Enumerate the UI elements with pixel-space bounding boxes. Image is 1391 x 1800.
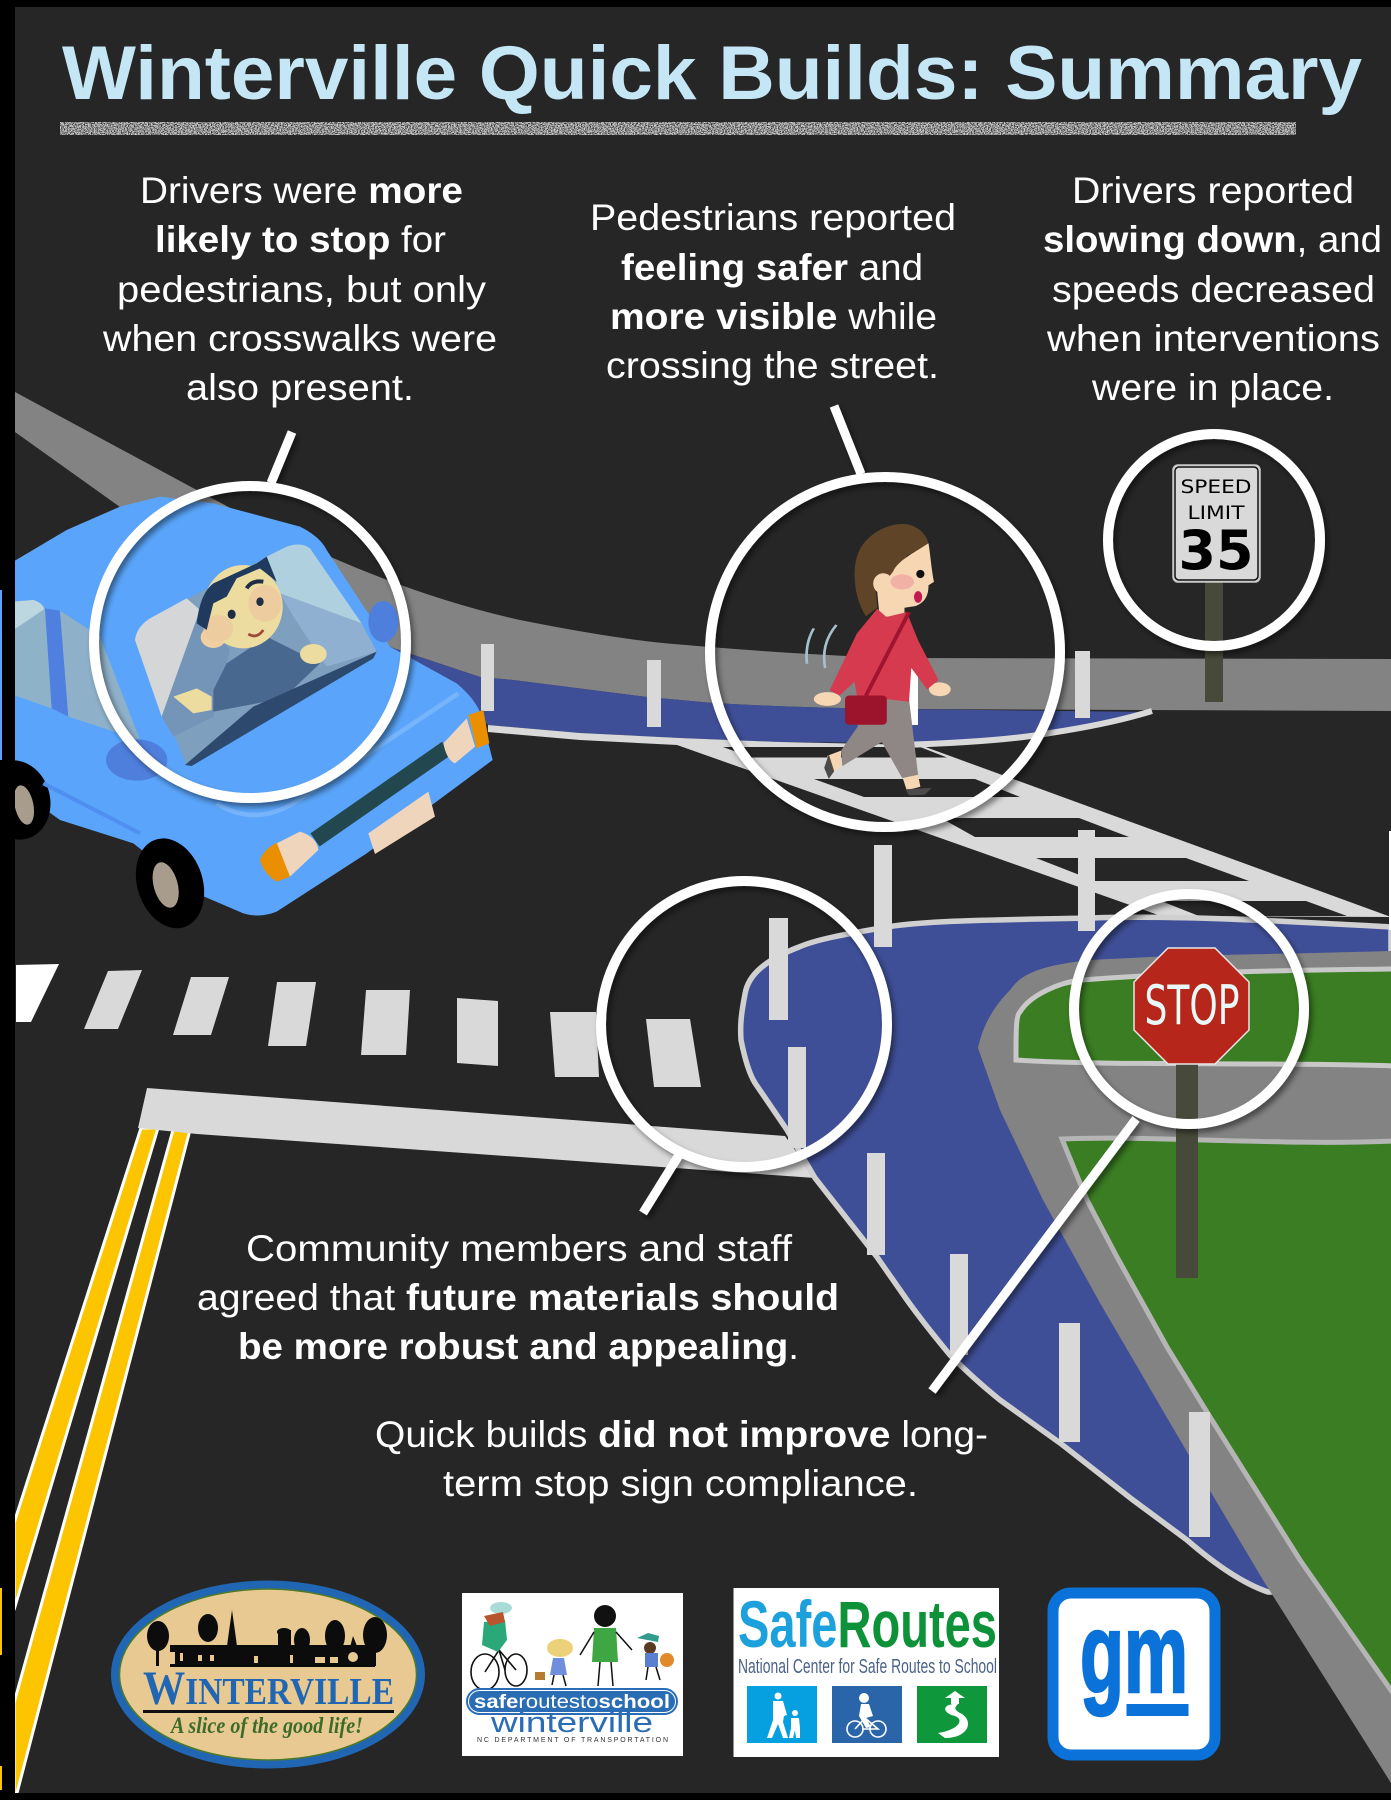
circle: pedestrian xyxy=(710,477,1060,827)
text: pedestrians safer: crossing the street. xyxy=(606,345,939,386)
text: future materials: be more robust and appealing . xyxy=(238,1326,799,1367)
icon: speed limit sign xyxy=(1173,465,1260,582)
leader: materials xyxy=(643,1155,679,1213)
licence plate xyxy=(368,792,435,854)
logo: GM xyxy=(1053,1590,1215,1755)
headlight right xyxy=(443,710,489,763)
bag strap xyxy=(866,612,909,696)
circle: driver xyxy=(94,486,406,798)
icon: winding route xyxy=(917,1686,987,1743)
pill inner line xyxy=(468,1690,676,1712)
eye xyxy=(916,570,924,578)
mouth xyxy=(914,591,922,603)
grille xyxy=(315,748,447,840)
text: slowing down: were in place. xyxy=(1091,367,1334,408)
rider xyxy=(482,1602,512,1652)
text: pedestrians safer xyxy=(590,197,956,386)
trousers xyxy=(841,699,918,778)
icon: blue car with driver xyxy=(0,497,493,937)
double yellow centre line xyxy=(14,1128,190,1793)
text: stop compliance: term stop sign compliance. xyxy=(443,1463,918,1504)
text: slowing down: when interventions xyxy=(1046,318,1380,359)
white panel xyxy=(734,1588,999,1757)
car body xyxy=(13,497,493,915)
logo: Town of Winterville xyxy=(115,1584,421,1764)
text: drivers stop: Drivers were more xyxy=(140,170,463,211)
adult xyxy=(580,1605,632,1686)
side line xyxy=(43,783,140,833)
child right xyxy=(637,1633,674,1680)
hands xyxy=(814,682,951,706)
logo: National Center for Safe Routes to School xyxy=(734,1587,999,1757)
lane edge line xyxy=(900,711,1152,745)
circle: stop sign xyxy=(1074,894,1304,1124)
text: stop compliance: Quick builds did not improve long- xyxy=(375,1414,988,1455)
sign border xyxy=(1175,467,1258,580)
text: drivers stop xyxy=(102,170,497,408)
side windows xyxy=(13,600,140,740)
rule xyxy=(143,1710,394,1713)
windows xyxy=(168,1652,358,1664)
winterville wordmark: winterville xyxy=(490,1707,653,1739)
text: future materials xyxy=(197,1228,839,1367)
sign text xyxy=(1178,476,1254,582)
title underline xyxy=(60,122,1296,135)
skyline xyxy=(147,1610,387,1667)
town name: WINTERVILLE xyxy=(143,1662,394,1715)
icon: walking xyxy=(747,1686,817,1743)
speed sign post xyxy=(1205,582,1223,702)
windshield xyxy=(135,545,377,765)
dashed crosswalk stripes xyxy=(16,964,701,1087)
octagon xyxy=(1134,948,1249,1064)
border edge slivers xyxy=(0,590,2,1790)
sign text: 35 xyxy=(1178,519,1254,582)
text: pedestrians safer: more visible while xyxy=(610,296,937,337)
hood highlight xyxy=(217,693,458,815)
text: drivers stop: likely to stop for xyxy=(155,219,446,260)
leader: pedestrian xyxy=(834,406,861,474)
stop label: STOP xyxy=(1144,974,1240,1037)
magnifier circles and leader lines xyxy=(94,406,1320,1391)
white panel xyxy=(462,1593,683,1756)
subtitle: National Center for Safe Routes to School xyxy=(738,1656,997,1678)
stop sign post xyxy=(1176,1061,1198,1278)
text: stop compliance xyxy=(375,1414,988,1504)
leader: stop sign xyxy=(932,1119,1136,1391)
dashboard xyxy=(185,652,377,766)
text: drivers stop: pedestrians, but only xyxy=(117,269,487,310)
GM underline xyxy=(1126,1704,1188,1716)
headlight left xyxy=(260,832,318,882)
NCDOT line: NC DEPARTMENT OF TRANSPORTATION xyxy=(477,1737,668,1744)
sign plate xyxy=(1173,465,1260,582)
wordmark: SafeRoutes xyxy=(738,1587,997,1661)
icon: stop sign xyxy=(1134,948,1249,1064)
text: pedestrians safer: feeling safer and xyxy=(621,247,923,288)
text: slowing down: speeds decreased xyxy=(1052,269,1375,310)
driver head xyxy=(197,557,283,648)
text: slowing down: slowing down, and xyxy=(1043,219,1382,260)
blue island xyxy=(741,917,1391,1592)
front wheel xyxy=(125,829,215,937)
text: slowing down: Drivers reported xyxy=(1072,170,1354,211)
leader: driver xyxy=(271,432,292,483)
oval xyxy=(115,1584,421,1764)
icon: walking woman xyxy=(807,524,951,795)
circle: speed sign xyxy=(1108,434,1320,646)
lower green area xyxy=(1062,1138,1391,1696)
ear xyxy=(873,573,893,594)
rear wheel xyxy=(0,753,59,847)
banner text: safe routes toschool xyxy=(474,1692,670,1713)
side mirrors xyxy=(106,601,398,781)
badge xyxy=(1053,1593,1215,1755)
driver hands xyxy=(173,644,327,713)
text: slowing down xyxy=(1043,170,1382,408)
face xyxy=(877,543,934,618)
delineator posts xyxy=(481,644,1391,1537)
child left xyxy=(535,1639,573,1686)
oval inner ring xyxy=(120,1589,416,1760)
text: drivers stop: when crosswalks were xyxy=(102,318,497,359)
slogan: A slice of the good life! xyxy=(169,1713,363,1738)
circle: crosswalk materials xyxy=(601,881,887,1167)
gray inner road xyxy=(978,951,1391,1783)
diagonal ladder crosswalk xyxy=(488,725,1391,917)
text: future materials: Community members and staff xyxy=(246,1228,793,1269)
title: Winterville Quick Builds: Summary xyxy=(62,31,1362,116)
sign text: LIMIT xyxy=(1188,502,1245,524)
text: pedestrians safer: Pedestrians reported xyxy=(590,197,956,238)
bag xyxy=(845,696,887,725)
text: future materials: agreed that future materials should xyxy=(197,1277,839,1318)
icon: cycling xyxy=(832,1686,902,1743)
feet xyxy=(824,751,932,795)
stop bar xyxy=(138,1088,815,1178)
blush xyxy=(890,574,914,589)
sign text: SPEED xyxy=(1180,476,1252,498)
upper blue bike lane xyxy=(393,648,1152,743)
sweater xyxy=(830,609,938,702)
pill banner xyxy=(466,1688,678,1714)
upper green area xyxy=(1016,969,1391,1066)
upper gray road band xyxy=(15,392,1391,711)
GM letters: gm xyxy=(1080,1590,1188,1716)
hair xyxy=(855,524,929,616)
driver shirt xyxy=(213,637,320,712)
text: drivers stop: also present. xyxy=(186,367,414,408)
logo: Safe Routes to School Winterville xyxy=(462,1593,683,1756)
motion lines xyxy=(807,625,836,668)
bicycle xyxy=(471,1650,527,1690)
